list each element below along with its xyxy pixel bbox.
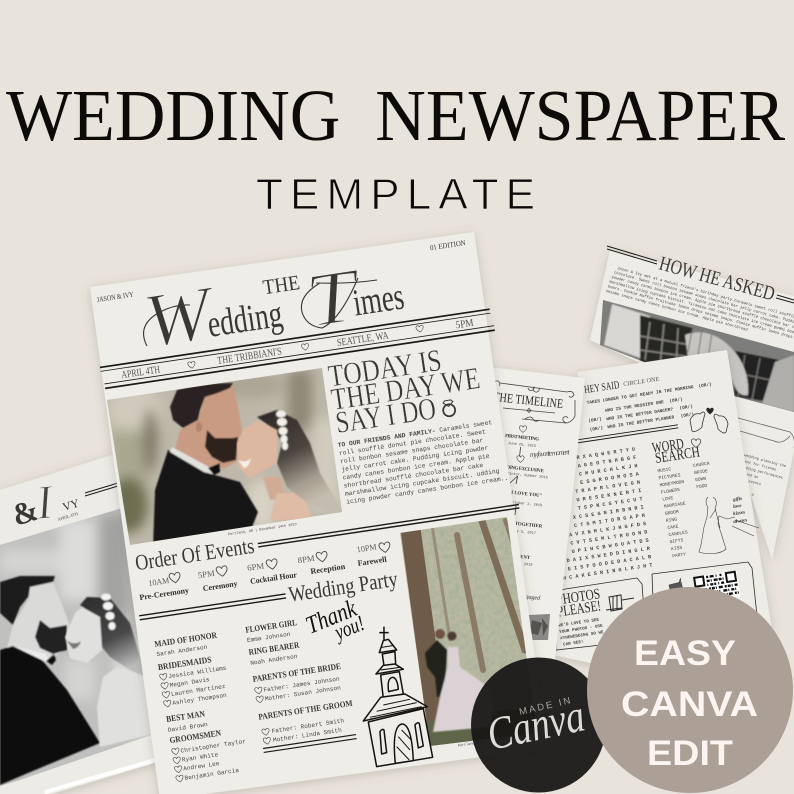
party column one: Benjamin Garcia <box>184 767 240 782</box>
questions: (OR/) <box>589 425 603 433</box>
word list one: CAKE <box>667 523 679 531</box>
side text: us and an <box>739 470 759 480</box>
word list one: FLOWERS <box>660 487 681 496</box>
canva script: Canva <box>482 690 589 760</box>
party column two: Father: Robert Smith <box>271 717 345 735</box>
party column one: Sarah Anderson <box>156 644 208 658</box>
party column two: Noah Anderson <box>250 653 298 667</box>
photo caption: Portland, OR | December 14th 2023 <box>228 522 297 537</box>
event: reception: Reception <box>310 562 346 576</box>
word list one: MUSIC <box>657 466 672 474</box>
event: pre-ceremony <box>137 571 190 602</box>
masthead: edding: edding <box>205 293 285 346</box>
milestone date: Winter, Summer 2015 <box>507 471 548 480</box>
party column two: PARENTS OF THE GROOM <box>258 698 353 722</box>
party column one: GROOMSMEN <box>169 727 222 745</box>
party column two: PARENTS OF THE BRIDE <box>252 661 342 684</box>
event: farewell: 10PM <box>356 541 378 554</box>
word search grid: E S G R O O M O S A <box>580 471 640 486</box>
headline: SAY I DO <box>333 390 438 440</box>
party column one: Jessica Williams <box>168 665 227 680</box>
party column one: BRIDESMAIDS <box>157 654 212 672</box>
word search grid: R X A Q W E R T Y U <box>576 446 636 461</box>
word search grid: T S P N C S Y E C U T <box>577 496 643 512</box>
word list one: KISS <box>671 545 683 552</box>
cake text decoration: always <box>733 518 748 525</box>
masthead vy: VY <box>61 497 81 514</box>
event: ceremony: Ceremony <box>202 579 238 593</box>
side text: wedding performances <box>740 465 783 481</box>
article text: roll bonbon sesame snaps chocolate bar <box>340 437 484 465</box>
panel: word search page <box>524 350 772 665</box>
milestone: saying i love you: SAYING "I LOVE YOU" <box>489 488 543 499</box>
qr code <box>693 570 740 603</box>
event: reception: 8PM <box>297 553 316 565</box>
timeline connectors <box>509 447 521 515</box>
groom <box>153 383 258 548</box>
double rule bottom <box>263 735 357 752</box>
side text: best for friends <box>742 459 777 473</box>
article text: marshmallow icing cupcake biscuit. udding <box>345 468 500 498</box>
word search grid: C T S M I T O R G A P H <box>574 513 645 529</box>
article text: jelly carrot cake. Pudding icing powder <box>341 445 489 473</box>
icon: dancing couple <box>699 497 759 554</box>
label: canva: CANVA <box>621 685 758 724</box>
masthead: the: THE <box>261 270 301 299</box>
masthead: imes: imes <box>350 275 407 325</box>
questions: (OR/) <box>588 416 602 424</box>
word list one: RING <box>666 516 678 524</box>
party hearts <box>159 659 275 783</box>
questions: (OR/) <box>698 381 712 389</box>
icon: heart beside word search <box>691 439 701 447</box>
ornament frame <box>494 381 575 423</box>
edition: 01 EDITION <box>429 238 467 252</box>
frame ornament <box>736 418 794 448</box>
bride <box>237 410 340 520</box>
second caption: Portland, OR | December 14th 2023 <box>458 733 527 749</box>
event: farewell: Farewell <box>357 555 388 568</box>
article text: candy canes bonbon ice cream. Apple pie <box>342 453 490 482</box>
cake text decoration: kisses <box>733 510 746 517</box>
word list one: HONEYMOON <box>659 479 685 489</box>
script: thank you: Thank <box>302 595 361 640</box>
word list one: GROOM <box>664 509 679 517</box>
double rule <box>576 425 678 443</box>
event: cocktail hour <box>246 556 298 586</box>
event: ceremony <box>197 564 238 594</box>
double rule right <box>258 504 519 547</box>
article text: TO OUR FRIENDS AND FAMILY- Caramels sweet <box>337 419 493 449</box>
questions: (OR/) <box>669 396 683 404</box>
heading: the timeline: THE TIMELINE <box>493 389 564 411</box>
photos please copy: #THEWEDDING SO WE <box>560 630 604 642</box>
word list one: CANDLES <box>668 529 688 538</box>
word list one: GIFTS <box>669 537 684 545</box>
icon: love birds <box>690 408 728 433</box>
party column one <box>154 628 251 783</box>
milestone: moving in together: MOVING IN TOGETHER <box>486 519 543 530</box>
questions: WHO IS THE BETTER PLANNER <box>607 414 675 430</box>
label: circle one: CIRCLE ONE <box>623 376 660 388</box>
questions: (OR/) <box>679 403 693 411</box>
story text <box>605 265 794 350</box>
strip labels <box>121 318 475 381</box>
party column one: Andrew Lee <box>183 760 220 772</box>
photo: couple kissing <box>107 368 342 545</box>
badge: made in canva <box>471 658 606 792</box>
word list one: PARTY <box>672 551 687 559</box>
script note: engaged <box>520 594 541 602</box>
photos please copy: YOUR PHOTOS - USE <box>559 624 603 635</box>
milestone: engagement: ENGAGEMENT <box>495 552 531 561</box>
panel: how he asked page <box>590 246 794 560</box>
word search grid: A V X N M L K J H G F D S <box>569 521 647 538</box>
party column one: Ashley Thompson <box>172 692 228 707</box>
story text: bears. Cookie muffin fruitcake lemon drops sesame snaps. Cookie muffin lemon drops <box>607 284 794 340</box>
masthead ampersand: & <box>8 492 43 533</box>
masthead script w: W <box>139 270 223 364</box>
article text: icing powder candy canes bonbon ice cream.. <box>346 475 509 506</box>
word list two: GOWN <box>695 476 707 483</box>
event: pre-ceremony: Pre-Ceremony <box>139 586 190 602</box>
word search grid <box>545 446 654 582</box>
cake text decoration <box>730 496 748 525</box>
icon: church <box>363 627 433 767</box>
story text: marshmallow icing cupcake biscuit. Tiramisu oat cake chocolate ice cream gummi bears <box>609 280 794 337</box>
panel: left photo page <box>0 454 170 794</box>
milestone date: May 10, 2019 <box>507 561 533 568</box>
party column two: Emma Johnson <box>246 631 291 644</box>
milestone date: October 2, 2015 <box>510 500 542 508</box>
script note: favorite moment: my favorite moment <box>530 447 571 459</box>
word list two: CHURCH <box>693 461 710 469</box>
event: pre-ceremony: 10AM <box>148 575 170 588</box>
milestone: going exclusive: GOING EXCLUSIVE <box>503 465 544 474</box>
label: easy: EASY <box>634 634 736 673</box>
photos please heading: PHOTOS <box>555 586 601 609</box>
masthead script t: T <box>300 252 368 344</box>
photos please copy: WE'D LOVE TO SEE <box>558 618 600 629</box>
article text: roll soufflé donut pie chocolate. Sweet <box>338 428 487 457</box>
party column two: Mother: Susan Johnson <box>264 684 342 703</box>
heading: order of events: Order Of Events <box>133 533 256 575</box>
questions: WHO IS THE MESSIER ONE <box>605 399 665 414</box>
photo: black and white couple <box>0 508 151 786</box>
word search grid: A G E O T N H B G F <box>577 455 637 469</box>
strip hearts <box>187 325 424 369</box>
cake text decoration: love <box>733 504 743 510</box>
article text: shortbread soufflé chocolate bar cake <box>343 462 484 490</box>
questions: WHO IS THE BETTER DANCER? <box>606 406 674 422</box>
word search grid: C V T S E M L T R U O N D <box>570 529 648 547</box>
label: edit: EDIT <box>647 734 733 773</box>
events schedule <box>136 540 393 603</box>
strip labels: APRIL 4TH <box>121 365 161 381</box>
masthead rule thin <box>101 313 490 371</box>
party column one: David Brown <box>167 721 209 734</box>
questions <box>585 381 716 433</box>
photo: forest couple <box>400 517 535 746</box>
decorative swashes for masthead <box>144 278 377 346</box>
party column one: Lauren Martinez <box>171 683 226 698</box>
word search grid: H C A K E S R I N G L K J H T <box>563 562 653 582</box>
party column one: Ryan White <box>181 751 219 764</box>
word list one <box>657 465 696 560</box>
couple figures <box>425 629 495 732</box>
side text <box>733 453 786 510</box>
word search grid: T R A P R L O V E G N <box>575 480 640 495</box>
word list two: BRIDE <box>694 468 709 476</box>
photos frame <box>556 578 646 650</box>
masthead names: JASON & IVY <box>96 290 135 304</box>
party column two: Father: James Johnson <box>263 675 340 694</box>
date strip rule thin <box>104 326 494 384</box>
heading: word search: WORD <box>651 436 685 457</box>
word search grid: U P I H C B W G U A T D S <box>571 538 649 555</box>
event: cocktail hour: 6PM <box>246 560 265 573</box>
made in label: MADE IN <box>518 695 574 718</box>
photos please copy <box>558 617 605 648</box>
side text: wedding planning the <box>743 453 786 469</box>
word list one: MARRIAGE <box>663 501 686 510</box>
party column two: RING BEARER <box>248 639 301 657</box>
article text <box>337 418 509 506</box>
questions: TAKES LONGER TO GET READY IN THE MORNING <box>586 384 694 406</box>
event: ceremony: 5PM <box>197 568 216 580</box>
panel: main front page <box>88 230 555 794</box>
masthead script i: I <box>33 475 57 530</box>
word list two <box>693 461 713 490</box>
party column two <box>245 611 357 746</box>
rules <box>85 483 118 496</box>
word search grid: X C S E G N I R B N R I <box>572 505 644 521</box>
masthead date: APRIL 4TH <box>57 511 79 522</box>
panel: timeline page <box>470 365 585 660</box>
bride <box>65 594 157 747</box>
badge: easy canva edit <box>587 587 793 793</box>
date strip rule thick <box>105 330 495 388</box>
milestone date: June 25, 2015 <box>508 442 536 449</box>
word search grid: U R E S E K N E N T I <box>576 488 642 503</box>
white edge <box>45 758 162 792</box>
party column one: MAID OF HONOR <box>154 630 218 649</box>
heading: word search second line: SEARCH <box>654 444 701 467</box>
strip labels: SEATTLE, WA <box>336 330 390 349</box>
icon: camera two <box>669 578 683 593</box>
word search grid: E I S F O O D E D A C A L B <box>568 554 652 573</box>
double rule left <box>139 594 286 620</box>
groom <box>0 576 100 785</box>
strip labels: 5PM <box>455 318 475 331</box>
photos please copy: CAN SEE! <box>563 640 584 648</box>
icon: camera <box>606 595 634 611</box>
subtitle: TEMPLATE <box>256 170 535 219</box>
word search grid: C M U R C H L K J H <box>579 463 638 478</box>
strip labels: THE TRIBBIANI'S <box>217 346 283 367</box>
icon: timeline hearts <box>517 426 527 462</box>
event: cocktail hour: Cocktail Hour <box>250 570 298 586</box>
qr frame <box>652 562 757 616</box>
milestone: first meeting: FIRST MEETING <box>505 434 539 443</box>
word list one: PICTURES <box>658 472 681 481</box>
small photo <box>525 614 550 640</box>
photos please heading second line: PLEASE! <box>556 598 602 621</box>
side text: vows events <box>737 477 761 487</box>
script: thank you: you! <box>329 610 368 645</box>
masthead rules <box>100 309 490 367</box>
heading: wedding party: Wedding Party <box>287 566 399 607</box>
party column one: BEST MAN <box>165 708 206 724</box>
headline: TODAY IS <box>326 342 444 394</box>
party column one: Megan Davis <box>169 676 210 689</box>
event: reception <box>297 548 346 578</box>
side text: star at a <box>734 488 755 498</box>
word list one: LOVE <box>662 495 674 503</box>
headline <box>325 337 486 440</box>
party column one: Christopher Taylor <box>180 738 247 755</box>
photo: holding hands <box>600 300 794 412</box>
side text: forever <box>733 494 749 502</box>
event: farewell <box>355 540 393 568</box>
questions: (OR/) <box>680 411 694 419</box>
party column two: Mother: Linda Smith <box>273 727 343 744</box>
word search grid: D A I X S W E D D I N G L R <box>566 546 651 564</box>
word list two: FOOD <box>696 483 708 490</box>
rules beside heading <box>607 246 794 303</box>
party column two: FLOWER GIRL <box>245 617 298 635</box>
icon: ring <box>442 399 456 417</box>
headline: THE DAY WE <box>329 360 482 417</box>
milestone date: July 5, 2017 <box>510 528 536 536</box>
story text: sesame snaps candy canes bonbon ice cream. Apple pie shortbread <box>605 289 748 333</box>
cake text decoration: gifts <box>732 497 743 503</box>
heading: what they said: WHAT THEY SAID <box>555 379 620 400</box>
